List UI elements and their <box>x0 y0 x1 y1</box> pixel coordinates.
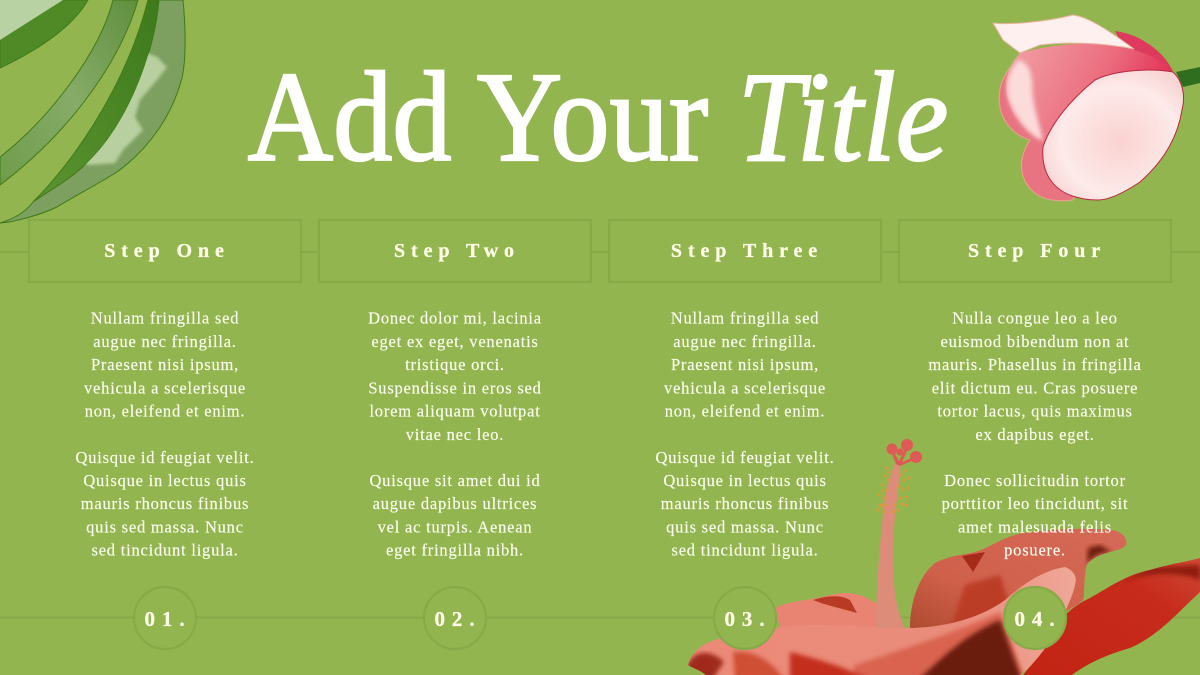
step four number <box>1004 587 1066 649</box>
step three text: Quisque in lectus quis <box>663 471 827 490</box>
step two text: Donec dolor mi, lacinia <box>368 308 542 328</box>
step one text: Quisque in lectus quis <box>83 471 247 490</box>
timeline connector lines <box>0 252 1200 618</box>
step two text: augue dapibus ultrices <box>373 494 537 513</box>
step three header <box>609 220 881 282</box>
panel: step three <box>609 220 881 649</box>
step three text: Praesent nisi ipsum, <box>671 355 819 374</box>
step three text: sed tincidunt ligula. <box>672 540 818 560</box>
main front petal <box>688 567 1076 675</box>
step four text: Donec sollicitudin tortor <box>944 471 1126 490</box>
step one number <box>134 587 196 649</box>
step one number: 01. <box>145 607 191 631</box>
step four text: ex dapibus eget. <box>975 425 1095 444</box>
step four header: Step Four <box>968 240 1106 262</box>
step one text: sed tincidunt ligula. <box>92 540 238 560</box>
step two text <box>368 308 542 560</box>
step three text: non, eleifend et enim. <box>665 402 825 420</box>
step one header: Step One <box>104 240 230 262</box>
step one text <box>76 308 254 560</box>
step two text: Suspendisse in eros sed <box>368 378 542 398</box>
step one text: Praesent nisi ipsum, <box>91 355 239 374</box>
step three text: mauris rhoncus finibus <box>661 494 829 513</box>
middle pink petal <box>1006 44 1173 141</box>
step two header <box>319 220 591 282</box>
step three text: Quisque id feugiat velit. <box>656 448 834 467</box>
step four text: elit dictum eu. Cras posuere <box>932 378 1138 398</box>
back left petal <box>775 593 905 628</box>
step four header <box>899 220 1171 282</box>
step one text: mauris rhoncus finibus <box>81 494 249 513</box>
panel: step one <box>29 220 301 649</box>
icon: leaves top left <box>0 0 185 223</box>
step two text: vitae nec leo. <box>406 425 504 444</box>
step three text: quis sed massa. Nunc <box>666 518 824 536</box>
step two header: Step Two <box>394 240 520 262</box>
step one text: vehicula a scelerisque <box>84 378 246 398</box>
step two number <box>424 587 486 649</box>
title: Add Your Title <box>248 46 948 188</box>
step three text <box>656 308 834 560</box>
step two text: Quisque sit amet dui id <box>369 471 541 490</box>
stamen tips <box>886 439 922 466</box>
back right petal <box>910 529 1126 632</box>
right petal <box>1023 558 1200 675</box>
step one text: Nullam fringilla sed <box>91 308 239 328</box>
step one text: quis sed massa. Nunc <box>86 518 244 536</box>
step four text: euismod bibendum non at <box>941 332 1129 351</box>
step three text: Nullam fringilla sed <box>671 308 819 328</box>
step three text: augue nec fringilla. <box>673 332 817 351</box>
stamen <box>876 462 905 628</box>
step two text: eget ex eget, venenatis <box>371 332 539 351</box>
step four text: Nulla congue leo a leo <box>952 308 1118 328</box>
step three header: Step Three <box>671 240 823 262</box>
step one text: non, eleifend et enim. <box>85 402 245 420</box>
stem <box>1176 67 1200 87</box>
step four text: tortor lacus, quis maximus <box>937 402 1133 420</box>
step two number: 02. <box>435 607 481 631</box>
step two text: lorem aliquam volutpat <box>369 402 541 420</box>
step one text: augue nec fringilla. <box>93 332 237 351</box>
step two text: tristique orci. <box>405 355 505 374</box>
step four number: 04. <box>1015 607 1061 631</box>
step three number <box>714 587 776 649</box>
panel: step four <box>899 220 1171 649</box>
step two text: vel ac turpis. Aenean <box>378 518 532 536</box>
icon: tulip top right <box>993 15 1200 201</box>
step four text: amet malesuada felis <box>958 518 1112 536</box>
step three number: 03. <box>725 607 771 631</box>
big light petal <box>1043 70 1184 200</box>
step four text <box>928 308 1142 560</box>
back petal <box>999 68 1080 201</box>
step four text: posuere. <box>1004 540 1066 560</box>
step four text: porttitor leo tincidunt, sit <box>942 494 1128 513</box>
white top petal <box>993 15 1134 53</box>
step one text: Quisque id feugiat velit. <box>76 448 254 467</box>
pollen <box>876 466 910 514</box>
step three text: vehicula a scelerisque <box>664 378 826 398</box>
top dark petal <box>1115 31 1173 72</box>
front petal folds <box>686 612 1025 675</box>
step four text: mauris. Phasellus in fringilla <box>928 355 1142 374</box>
step one header <box>29 220 301 282</box>
panel: step two <box>319 220 591 649</box>
step two text: eget fringilla nibh. <box>386 540 524 560</box>
icon: hibiscus flower bottom right <box>686 439 1200 675</box>
